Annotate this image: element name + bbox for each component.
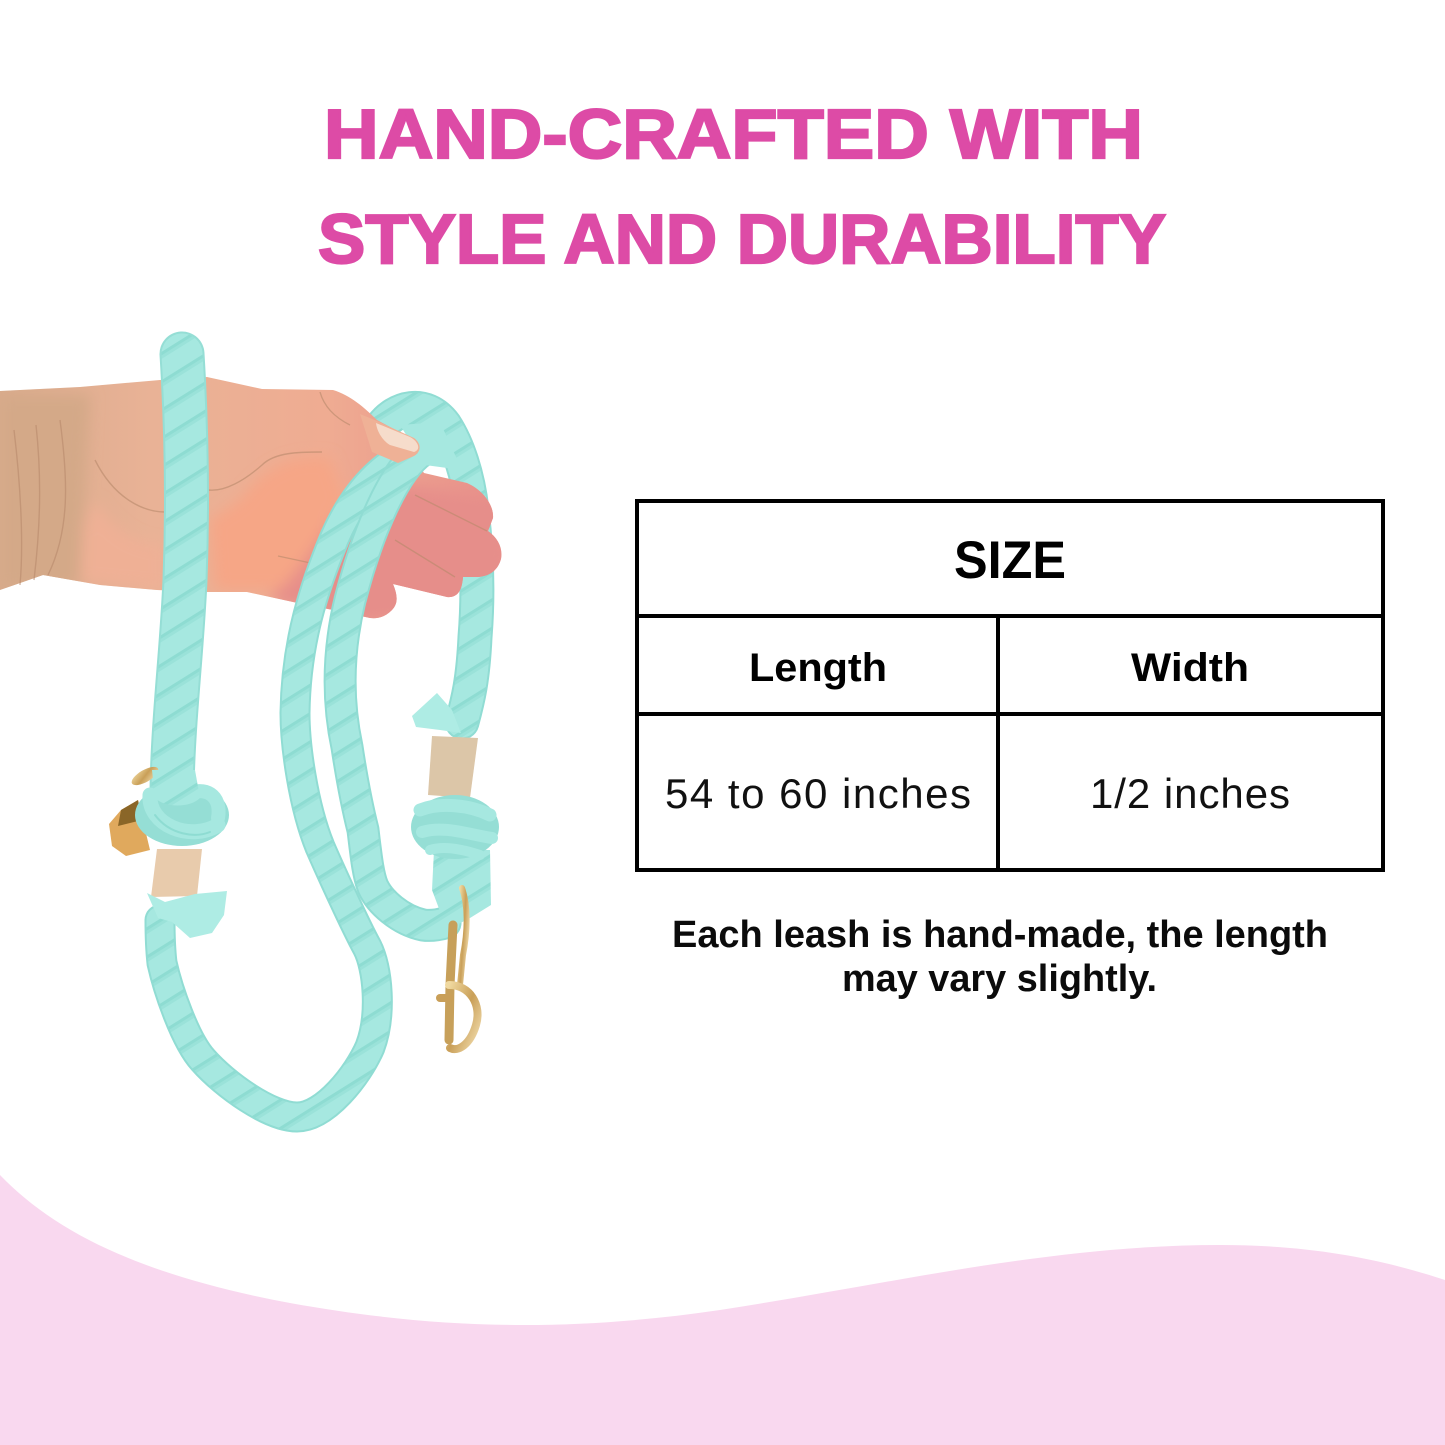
left frayed end <box>147 891 227 938</box>
title: STYLE AND DURABILITY <box>318 200 1166 278</box>
title <box>318 95 1166 278</box>
left rope handle <box>172 354 186 790</box>
note text: may vary slightly. <box>842 958 1157 1000</box>
background wave <box>0 1175 1445 1445</box>
note text <box>672 914 1328 1000</box>
rope strand behind the hand <box>382 408 477 722</box>
table grid <box>637 501 1383 870</box>
right lower rope stub <box>432 850 491 930</box>
brass bell <box>109 763 161 856</box>
title: HAND-CRAFTED WITH <box>324 95 1143 173</box>
note text: Each leash is hand-made, the length <box>672 914 1328 956</box>
column heading: length: Length <box>749 646 887 690</box>
right frayed end <box>412 693 461 733</box>
length value: 54 to 60 inches <box>665 770 971 817</box>
size table <box>637 501 1383 870</box>
skin creases <box>14 392 487 585</box>
left knot <box>135 770 229 846</box>
photo: hand holding rope leash <box>0 354 505 1117</box>
lower rope loop <box>160 452 420 1117</box>
brass snap hook <box>440 888 478 1049</box>
width value: 1/2 inches <box>1090 770 1290 817</box>
table header: size: SIZE <box>954 531 1066 590</box>
left twine wrap <box>151 849 202 897</box>
rope loop junction <box>400 422 462 470</box>
right twine wrap <box>428 736 478 798</box>
second rope strand <box>340 450 445 925</box>
hand <box>0 377 505 625</box>
right knot <box>411 795 499 859</box>
column heading: width: Width <box>1131 646 1249 690</box>
thumb tip over rope <box>360 414 420 463</box>
thumbnail <box>376 423 418 452</box>
soft palm and finger shading <box>0 395 505 625</box>
